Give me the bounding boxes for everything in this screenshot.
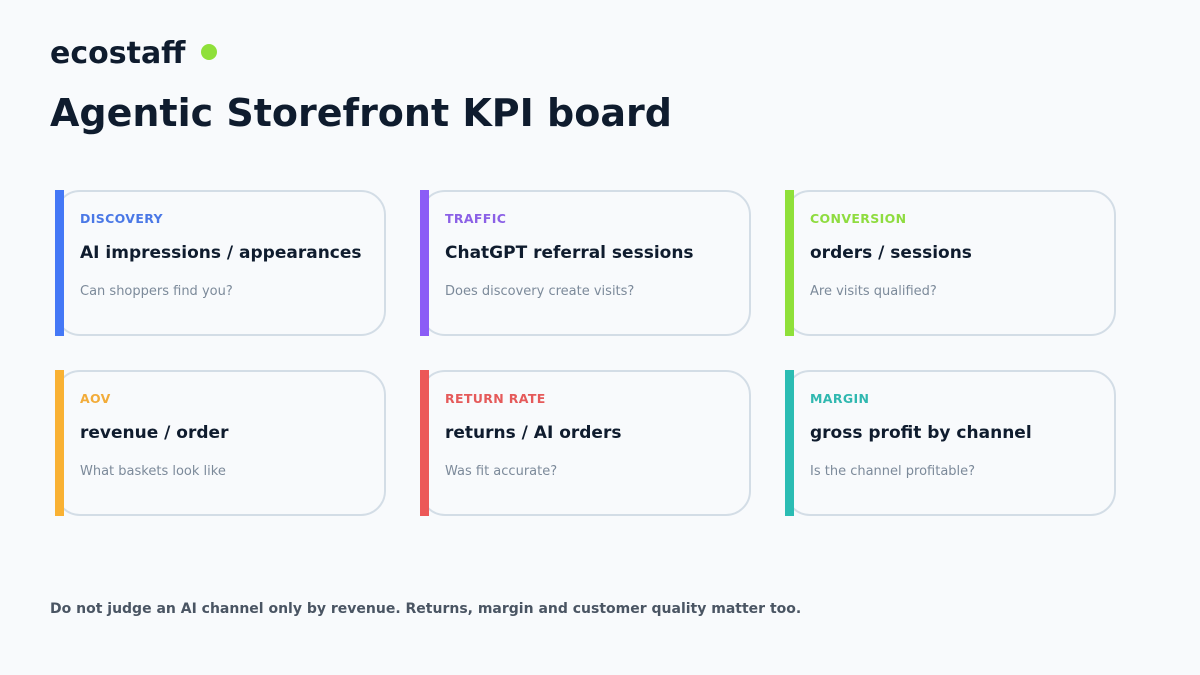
title: Agentic Storefront KPI board bbox=[50, 91, 672, 135]
panel: margin: MARGIN bbox=[810, 391, 869, 406]
panel: traffic: Does discovery create visits? bbox=[445, 284, 634, 299]
panel: discovery: DISCOVERY bbox=[80, 211, 164, 226]
panel: discovery: AI impressions / appearances bbox=[80, 243, 362, 263]
footer note: Do not judge an AI channel only by revenue. Returns, margin and customer quality matter too. bbox=[50, 601, 801, 617]
panel: conversion bbox=[785, 190, 1115, 336]
panel: return rate bbox=[420, 370, 750, 516]
panel: traffic: ChatGPT referral sessions bbox=[445, 243, 694, 263]
panel: aov: AOV bbox=[80, 391, 111, 406]
panel: discovery bbox=[55, 190, 385, 336]
panel: conversion: orders / sessions bbox=[810, 243, 972, 263]
panel: aov: revenue / order bbox=[80, 423, 229, 443]
panel: aov: What baskets look like bbox=[80, 464, 226, 479]
panel: margin: gross profit by channel bbox=[810, 423, 1032, 443]
panel: return rate: RETURN RATE bbox=[445, 391, 546, 406]
icon: logo dot bbox=[201, 44, 217, 60]
panel: margin: Is the channel profitable? bbox=[810, 464, 975, 479]
panel: conversion: Are visits qualified? bbox=[810, 284, 937, 299]
panel: return rate: Was fit accurate? bbox=[445, 464, 557, 479]
logo wordmark: ecostaff bbox=[50, 36, 186, 71]
panel: margin bbox=[785, 370, 1115, 516]
panel: traffic bbox=[420, 190, 750, 336]
panel: traffic: TRAFFIC bbox=[445, 211, 506, 226]
panel: conversion: CONVERSION bbox=[810, 211, 906, 226]
panel: return rate: returns / AI orders bbox=[445, 423, 621, 443]
panel: discovery: Can shoppers find you? bbox=[80, 284, 233, 299]
panel: aov bbox=[55, 370, 385, 516]
